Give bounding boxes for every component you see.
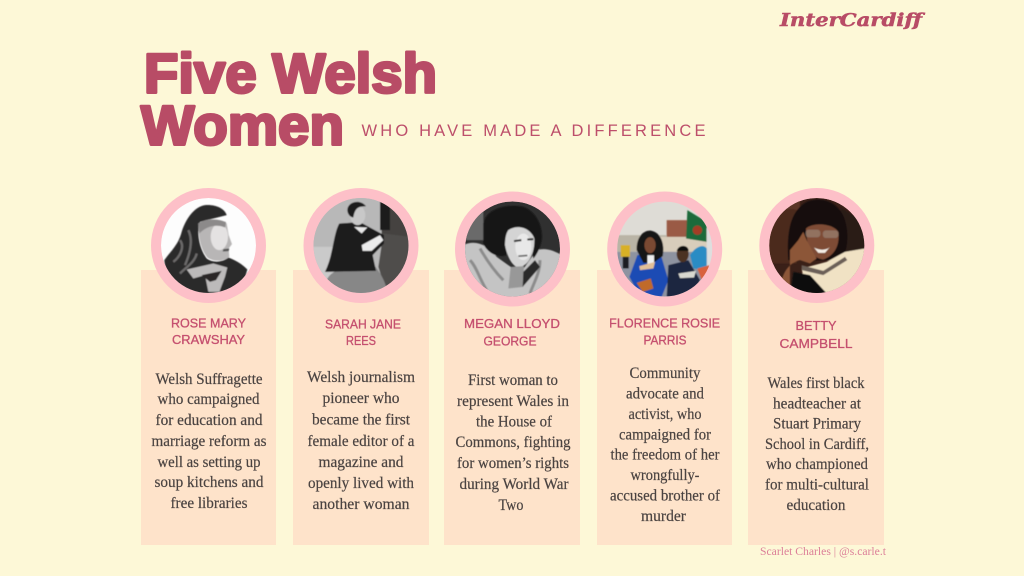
name: MEGAN LLOYD <box>464 317 560 331</box>
name <box>464 317 560 348</box>
card background <box>293 270 429 545</box>
card background <box>444 270 580 545</box>
biography: education <box>786 497 846 514</box>
biography <box>307 369 415 513</box>
credit: Scarlet Charles | @s.carle.t <box>760 544 887 558</box>
biography: Stuart Primary <box>773 416 861 432</box>
name <box>609 316 720 348</box>
biography: accused brother of <box>610 488 721 504</box>
biography: the freedom of her <box>610 446 720 464</box>
biography: School in Cardiff, <box>765 436 869 453</box>
biography <box>610 365 721 525</box>
biography: First woman to <box>468 372 558 389</box>
biography: represent Wales in <box>457 393 569 410</box>
biography: who championed <box>766 456 868 473</box>
biography: Welsh Suffragette <box>156 371 263 388</box>
biography: wrongfully- <box>630 467 700 484</box>
biography: headteacher at <box>773 396 862 412</box>
title: Women <box>141 94 344 156</box>
card background <box>748 270 884 545</box>
biography: advocate and <box>626 386 704 402</box>
subtitle: WHO HAVE MADE A DIFFERENCE <box>362 122 706 140</box>
name: GEORGE <box>484 334 536 348</box>
biography <box>152 371 266 512</box>
title <box>141 42 437 156</box>
name <box>171 316 247 347</box>
biography: female editor of a <box>308 433 415 450</box>
biography: for women’s rights <box>457 455 569 472</box>
biography: openly lived with <box>308 475 414 492</box>
panel: Florence Rosie Parris <box>597 192 732 545</box>
biography: campaigned for <box>619 426 712 444</box>
name <box>325 318 401 348</box>
biography: well as setting up <box>158 454 261 471</box>
biography: free libraries <box>170 495 248 512</box>
portrait: Megan Lloyd George <box>455 192 570 306</box>
card background <box>141 270 276 545</box>
name: CAMPBELL <box>780 337 853 351</box>
biography: who campaigned <box>158 391 260 408</box>
portrait: Betty Campbell <box>759 188 874 303</box>
biography: for multi-cultural <box>765 476 869 494</box>
biography: marriage reform as <box>152 433 266 450</box>
infographic canvas <box>140 12 926 558</box>
biography <box>456 372 571 514</box>
biography: Two <box>498 497 524 514</box>
name <box>780 319 853 351</box>
biography: pioneer who <box>322 390 400 407</box>
biography: activist, who <box>628 406 702 423</box>
panel: Rose Mary Crawshay <box>141 188 276 545</box>
panel: Betty Campbell <box>748 188 884 545</box>
biography: the House of <box>476 414 553 430</box>
biography: Commons, fighting <box>456 434 571 451</box>
biography: became the first <box>312 412 411 428</box>
biography: another woman <box>312 496 410 513</box>
card background <box>597 270 732 545</box>
biography: Welsh journalism <box>307 369 415 386</box>
name: REES <box>346 334 376 348</box>
biography <box>765 375 869 514</box>
biography: Wales first black <box>768 375 865 392</box>
name: ROSE MARY <box>171 316 247 330</box>
biography: magazine and <box>318 454 404 471</box>
title: Five Welsh <box>144 42 437 104</box>
portrait: Sarah Jane Rees <box>304 188 418 303</box>
panel: Megan Lloyd George <box>444 192 580 545</box>
name: SARAH JANE <box>325 318 401 332</box>
name: BETTY <box>796 319 837 333</box>
biography: Community <box>630 365 701 382</box>
name: CRAWSHAY <box>172 333 246 347</box>
biography: for education and <box>156 412 263 429</box>
portrait: Florence Rosie Parris <box>607 192 722 306</box>
biography: during World War <box>460 476 569 493</box>
name: PARRIS <box>644 334 686 348</box>
biography: murder <box>641 508 687 525</box>
logo: InterCardiff: InterCardiff <box>779 11 925 31</box>
panel: Sarah Jane Rees <box>293 188 429 545</box>
biography: soup kitchens and <box>154 474 264 491</box>
name: FLORENCE ROSIE <box>609 316 720 330</box>
portrait: Rose Mary Crawshay <box>151 188 266 303</box>
